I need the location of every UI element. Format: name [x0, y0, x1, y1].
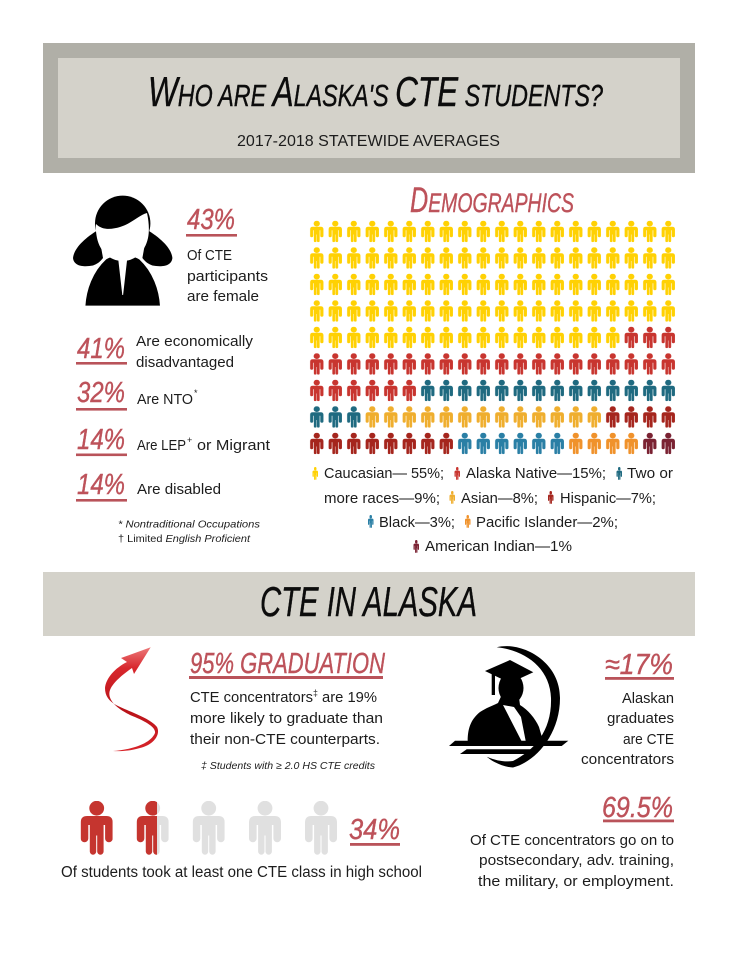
legend: Two or: [627, 465, 673, 482]
pictogram: 34% of students: [81, 801, 337, 855]
legend: [312, 465, 673, 555]
stat: 14% LEP or Migrant: Are LEP: [137, 437, 186, 454]
stat: 14% LEP or Migrant: 14%: [77, 424, 125, 456]
stat: 41% economically disadvantaged: disadvantaged: [136, 354, 234, 371]
stat: 95% graduation: are 19%: [318, 689, 377, 706]
stat: 41% economically disadvantaged: [76, 333, 254, 371]
stat: 69.5%: postsecondary, adv. training,: [479, 852, 674, 869]
American Indian people: [640, 432, 677, 458]
stat: 14% disabled: [76, 469, 221, 502]
Black people: [455, 432, 566, 458]
Hispanic people: [307, 406, 677, 458]
icon: red swoosh arrow: [105, 647, 158, 751]
stat: 43% female: participants: [187, 268, 268, 285]
stat: 41% economically disadvantaged: 41%: [77, 333, 125, 365]
legend: Asian—8%;: [461, 490, 538, 507]
stat: 32% NTO: 32%: [77, 377, 125, 409]
stat: about 17%: graduates: [607, 710, 674, 727]
legend: American Indian—1%: [425, 538, 572, 555]
legend: Caucasian— 55%;: [324, 465, 444, 482]
stat: 34%: 34%: [349, 814, 400, 846]
stat: 95% graduation: [189, 648, 385, 772]
title: WHO ARE ALASKA'S CTE STUDENTS?: [148, 68, 604, 115]
stat: 95% graduation: CTE concentrators: [190, 689, 315, 706]
heading: demographics: DEMOGRAPHICS: [410, 181, 574, 220]
section banner: CTE in Alaska: CTE IN ALASKA: [260, 578, 477, 625]
stat: 95% graduation: more likely to graduate than: [190, 710, 383, 727]
stat: 69.5%: [470, 792, 674, 890]
stat: 14% LEP or Migrant: or Migrant: [197, 437, 271, 454]
stat: 14% disabled: Are disabled: [137, 481, 221, 498]
stat: 69.5%: Of CTE concentrators go on to: [470, 832, 674, 849]
stat: about 17%: ≈17%: [605, 649, 673, 681]
stat: 32% NTO: [76, 377, 198, 411]
stat: 41% economically disadvantaged: Are economically: [136, 333, 254, 350]
Asian people: [363, 406, 603, 432]
stat: 14% LEP or Migrant: [76, 424, 271, 456]
stat: 69.5%: the military, or employment.: [478, 873, 674, 890]
stat: about 17%: concentrators: [581, 751, 674, 768]
footnotes: † Limited English Proficient: [118, 533, 251, 545]
legend: Alaska Native—15%;: [466, 465, 606, 482]
icon: female student: [73, 196, 172, 306]
stat: 43% female: Of CTE: [187, 247, 232, 264]
subtitle: 2017-2018 STATEWIDE AVERAGES: [237, 133, 500, 150]
Alaska Native people: [307, 326, 677, 406]
stat: 32% NTO: *: [194, 388, 198, 398]
stat: 43% female: [186, 204, 268, 305]
legend: Pacific Islander—2%;: [476, 514, 618, 531]
stat: 14% LEP or Migrant: +: [187, 435, 192, 445]
stat: 95% graduation: ‡: [313, 688, 318, 698]
legend: more races—9%;: [324, 490, 440, 507]
stat: 95% graduation: ‡ Students with ≥ 2.0 HS CTE credits: [201, 760, 376, 772]
legend: Black—3%;: [379, 514, 455, 531]
footnotes: * Nontraditional Occupations: [118, 518, 261, 530]
stat: 43% female: are female: [187, 288, 259, 305]
Two or more races people: [307, 379, 677, 432]
stat: 14% disabled: 14%: [77, 469, 125, 501]
stat: about 17%: are CTE: [623, 731, 674, 748]
icon: graduate: [449, 646, 568, 768]
stat: about 17%: [581, 649, 674, 768]
Pacific Islander people: [566, 432, 640, 458]
stat: 32% NTO: Are NTO: [137, 391, 193, 408]
caption: one CTE class: Of students took at least one CTE class in high school: [61, 864, 422, 881]
stat: 43% female: 43%: [187, 204, 235, 236]
stat: 69.5%: 69.5%: [602, 792, 673, 824]
stat: 95% graduation: their non-CTE counterparts.: [190, 731, 380, 748]
stat: about 17%: Alaskan: [622, 690, 674, 707]
legend: Hispanic—7%;: [560, 490, 656, 507]
header banner: [43, 43, 695, 173]
Caucasian people: [307, 220, 677, 352]
section banner: CTE in Alaska: [43, 572, 695, 636]
footnotes: [118, 518, 261, 545]
stat: 95% graduation: 95% GRADUATION: [190, 648, 385, 680]
pictogram chart: [307, 220, 677, 458]
